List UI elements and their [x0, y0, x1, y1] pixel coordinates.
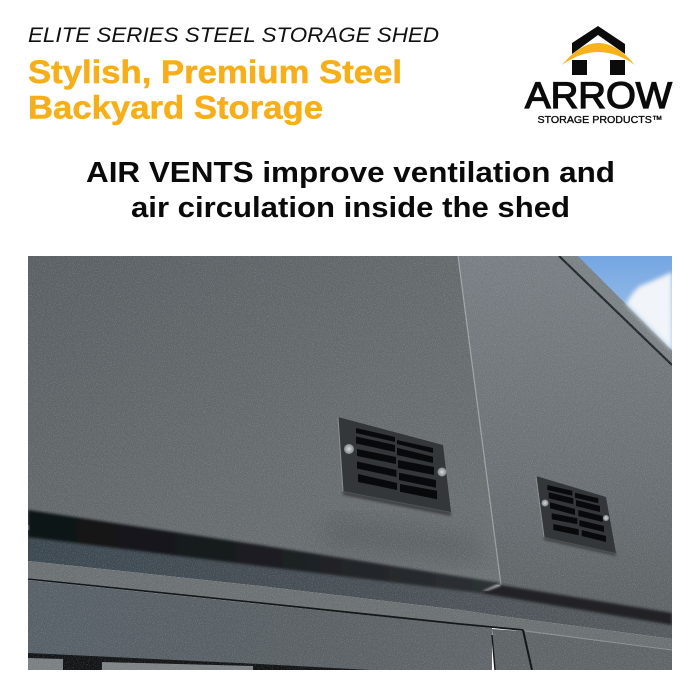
vent slats: [547, 485, 606, 542]
series label: ELITE SERIES STEEL STORAGE SHED: [28, 23, 439, 47]
light trim strip: [28, 561, 672, 650]
shadow band under right panel: [480, 585, 672, 625]
cloud: [626, 272, 672, 350]
vent shadow: [544, 537, 616, 556]
light edge line: [525, 631, 672, 650]
texture: [28, 256, 672, 670]
dark trim line: [559, 256, 672, 365]
vent frame: [536, 476, 616, 553]
vent screws: [542, 500, 548, 506]
door post: [492, 629, 532, 670]
upper left wall panel: [28, 256, 501, 585]
recessed band: [28, 530, 672, 639]
vent shadow: [343, 491, 451, 516]
headline: Backyard Storage: [28, 90, 323, 126]
headline: [28, 54, 402, 126]
vent: right: [536, 476, 616, 556]
roof trim: [560, 256, 672, 364]
vent slats: [356, 428, 437, 499]
sky over texture: [578, 256, 672, 350]
panel gap lines: [28, 579, 532, 670]
panel seam: [458, 256, 501, 585]
main statement: air circulation inside the shed: [131, 192, 570, 224]
logo: Arrow Storage Products: [525, 26, 672, 126]
logo wordmark: ARROW: [525, 75, 672, 116]
sky: [578, 256, 672, 350]
vent: left: [338, 417, 451, 516]
vent screws: [344, 444, 354, 454]
main statement: [86, 157, 615, 224]
door window band: [28, 653, 370, 670]
upper right wall panel: [458, 256, 672, 620]
photo: shed wall with air vents: [28, 256, 672, 670]
lower right panel: [523, 630, 672, 670]
lower door panel: [28, 580, 492, 670]
main statement: AIR VENTS improve ventilation and: [86, 157, 615, 189]
icon: house roof: [562, 26, 635, 75]
vent frame: [338, 417, 451, 512]
wall shadow patch: [332, 522, 472, 559]
shadow band under left panel: [28, 510, 501, 593]
logo tagline: STORAGE PRODUCTS™: [538, 114, 662, 126]
headline: Stylish, Premium Steel: [28, 54, 402, 90]
